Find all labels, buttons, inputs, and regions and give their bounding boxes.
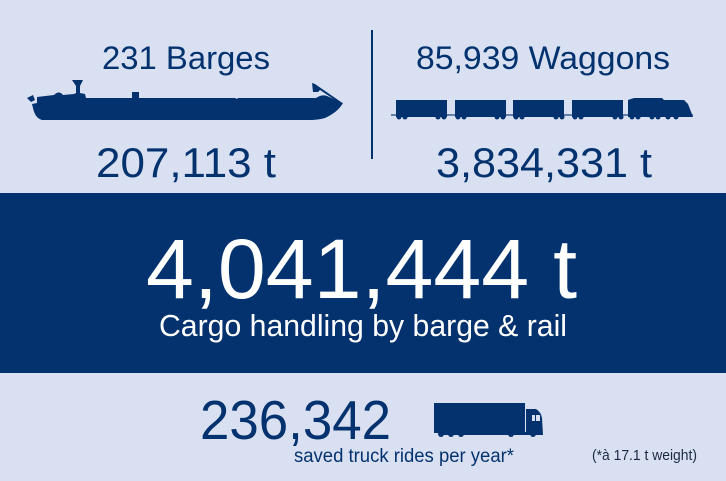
total tonnage: 4,041,444 t <box>146 222 577 316</box>
value: barge tonnage: 207,113 t <box>96 139 276 186</box>
footnote: (*à 17.1 t weight) <box>592 448 697 464</box>
band caption: Cargo handling by barge & rail <box>159 308 567 343</box>
divider <box>371 30 373 159</box>
saved truck rides number: 236,342 <box>200 389 391 451</box>
truck rides caption: saved truck rides per year* <box>294 446 515 467</box>
heading: waggons: 85,939 Waggons <box>416 40 670 76</box>
icon: barge <box>27 80 343 120</box>
icon: truck <box>434 403 543 437</box>
heading: barges: 231 Barges <box>102 40 270 76</box>
icon: train <box>391 98 693 120</box>
panel: total cargo band <box>0 193 726 373</box>
value: waggon tonnage: 3,834,331 t <box>436 139 652 186</box>
